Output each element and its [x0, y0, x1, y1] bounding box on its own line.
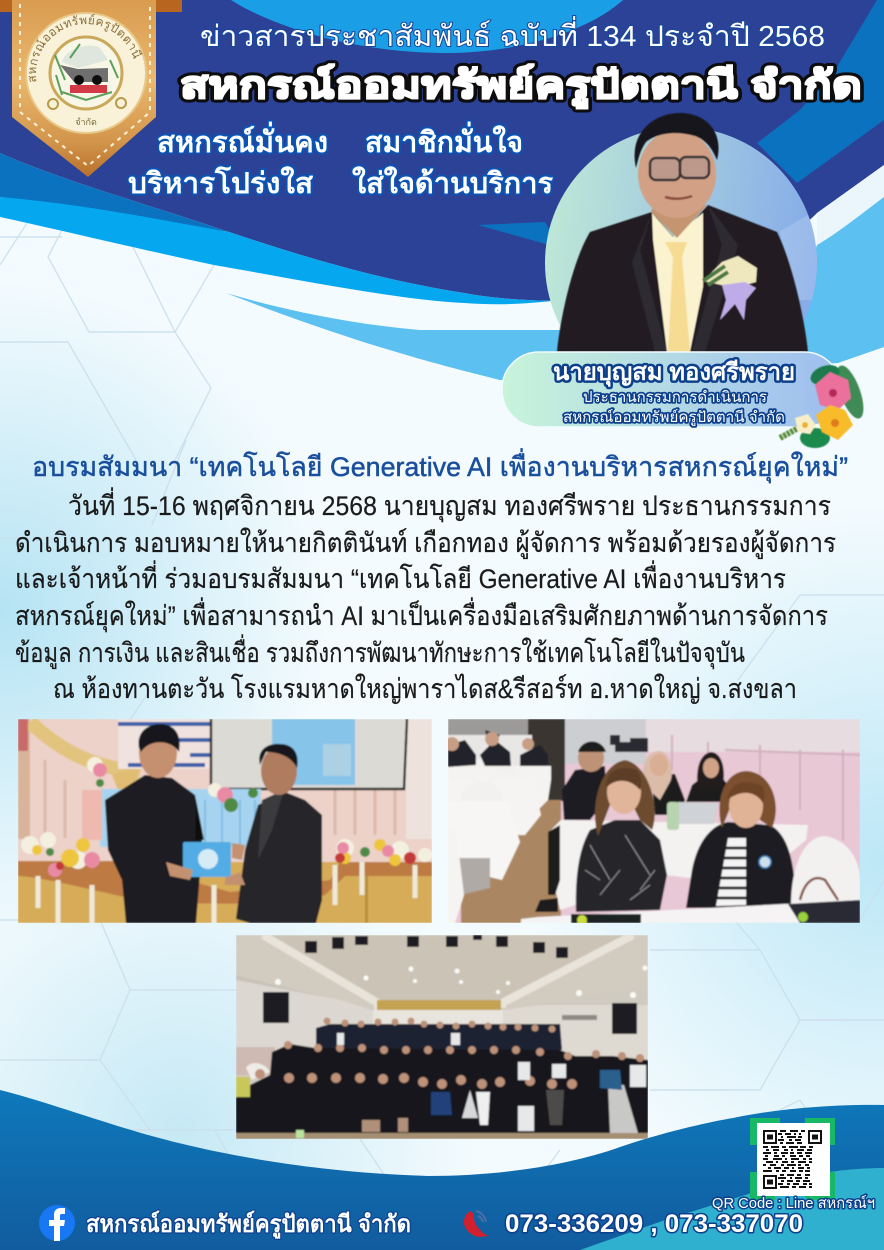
icon: facebook: [39, 1205, 75, 1241]
name plate: สหกรณ์ออมทรัพย์ครูปัตตานี จำกัด: [563, 409, 785, 426]
slogan text: ใส่ใจด้านบริการ: [352, 166, 553, 200]
article body text: [15, 487, 836, 704]
icon: logo seal: [25, 12, 147, 134]
name plate: [502, 352, 841, 427]
article body text: และเจ้าหน้าที่ ร่วมอบรมสัมมนา “เทคโนโลยี Generative AI เพื่องานบริหาร: [15, 560, 786, 594]
article body text: วันที่ 15-16 พฤศจิกายน 2568 นายบุญสม ทองศรีพราย ประธานกรรมการ: [68, 487, 831, 523]
facebook page name: สหกรณ์ออมทรัพย์ครูปัตตานี จำกัด: [86, 1210, 411, 1239]
QR caption: QR Code : Line สหกรณ์ฯ: [712, 1195, 875, 1212]
photo: presentation handover: [18, 719, 432, 923]
QR code: [750, 1118, 835, 1200]
slogan text: [128, 121, 553, 200]
icon: logo seal: จำกัด: [75, 117, 97, 127]
title: newsletter issue: ข่าวสารประชาสัมพันธ์ ฉบับที่ 134 ประจำปี 2568: [200, 16, 825, 53]
header wave background: [0, 0, 884, 380]
icon: logo seal: สหกรณ์ออมทรัพย์ครูปัตตานี: [28, 14, 143, 82]
title: co-op name: สหกรณ์ออมทรัพย์ครูปัตตานี จำกัด: [180, 64, 862, 109]
badge: co-op logo ribbon: [0, 0, 182, 177]
slogan text: สหกรณ์มั่นคง: [157, 121, 328, 159]
phone numbers: 073-336209 , 073-337070: [505, 1210, 803, 1238]
article body text: ข้อมูล การเงิน และสินเชื่อ รวมถึงการพัฒนาทักษะการใช้เทคโนโลยีในปัจจุบัน: [15, 634, 745, 670]
article body text: ณ ห้องทานตะวัน โรงแรมหาดใหญ่พาราไดส&รีสอร์ท อ.หาดใหญ่ จ.สงขลา: [53, 673, 797, 704]
photo: seminar attendees: [445, 719, 860, 925]
name plate: นายบุญสม ทองศรีพราย: [553, 359, 795, 388]
icon: phone: [464, 1211, 489, 1237]
slogan text: สมาชิกมั่นใจ: [365, 121, 523, 159]
slogan text: บริหารโปร่งใส: [128, 165, 313, 200]
icon: tropical flowers: [780, 361, 869, 448]
article heading: อบรมสัมมนา “เทคโนโลยี Generative AI เพื่องานบริหารสหกรณ์ยุคใหม่”: [32, 448, 848, 484]
name plate: ประธานกรรมการดำเนินการ: [583, 389, 767, 406]
footer wave background: [0, 1090, 884, 1250]
photo: group picture: [236, 935, 648, 1139]
chairman portrait: [545, 112, 817, 352]
